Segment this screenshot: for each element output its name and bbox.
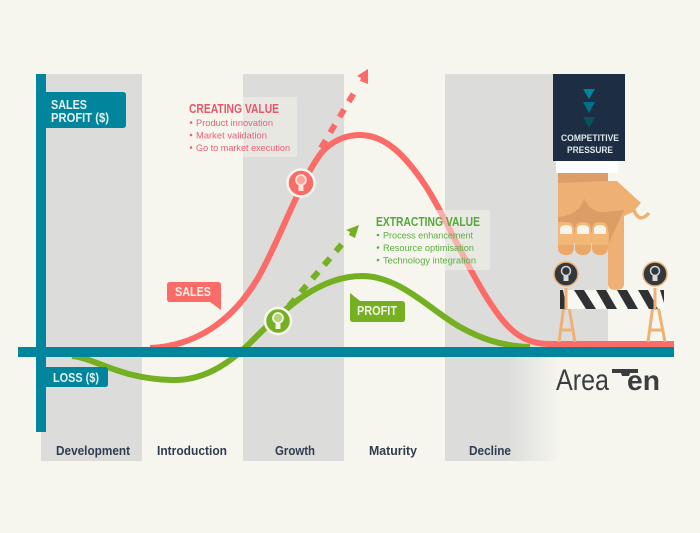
phase labels: Introduction xyxy=(157,444,227,458)
label: sales profit: SALES xyxy=(51,98,87,112)
label: loss: LOSS ($) xyxy=(53,371,99,385)
logo: AreaTen: Area xyxy=(556,364,609,397)
arrow: sales projection xyxy=(321,69,368,148)
label: sales: SALES xyxy=(175,285,211,299)
arrow: profit projection xyxy=(289,225,359,306)
logo: AreaTen: en xyxy=(627,365,660,396)
profit curve xyxy=(72,276,530,380)
text block: creating value: CREATING VALUE xyxy=(189,102,279,116)
barrier xyxy=(554,262,667,342)
text block: extracting value xyxy=(376,215,480,266)
label: sales profit xyxy=(46,92,126,128)
text block: extracting value: Resource optimisation xyxy=(383,243,474,254)
panel background: extracting value xyxy=(372,210,490,270)
text block: creating value xyxy=(189,102,290,154)
text block: creating value: Product innovation xyxy=(196,118,273,129)
phase labels: Growth xyxy=(275,444,315,458)
phase column: growth xyxy=(243,74,344,461)
label: profit xyxy=(350,293,405,322)
hand xyxy=(556,161,649,290)
label: loss xyxy=(46,367,108,387)
horizontal axis xyxy=(18,347,674,357)
phase labels: Decline xyxy=(469,444,511,458)
text block: extracting value: Process enhancement xyxy=(383,230,473,241)
text block: extracting value: Technology integration xyxy=(383,256,476,266)
phase column: development xyxy=(41,74,142,461)
icon: profit lightbulb xyxy=(265,308,291,334)
logo: AreaTen xyxy=(556,364,660,397)
label: profit: PROFIT xyxy=(357,304,397,318)
competitive pressure box xyxy=(553,74,625,161)
phase labels: Maturity xyxy=(369,444,417,458)
vertical axis xyxy=(36,74,46,432)
phase column: decline xyxy=(445,74,608,461)
text block: creating value: Go to market execution xyxy=(196,143,290,154)
label: sales profit: PROFIT ($) xyxy=(51,111,109,125)
sales curve xyxy=(150,135,674,348)
label: sales xyxy=(167,282,221,310)
icon: sales lightbulb xyxy=(288,170,314,196)
text block: creating value: Market validation xyxy=(196,130,267,141)
text block: extracting value: EXTRACTING VALUE xyxy=(376,215,480,229)
competitive pressure box: PRESSURE xyxy=(567,145,613,156)
phase labels: Development xyxy=(56,444,131,458)
competitive pressure box: COMPETITIVE xyxy=(561,133,619,144)
phase labels xyxy=(56,444,511,458)
panel background: creating value xyxy=(186,97,297,157)
